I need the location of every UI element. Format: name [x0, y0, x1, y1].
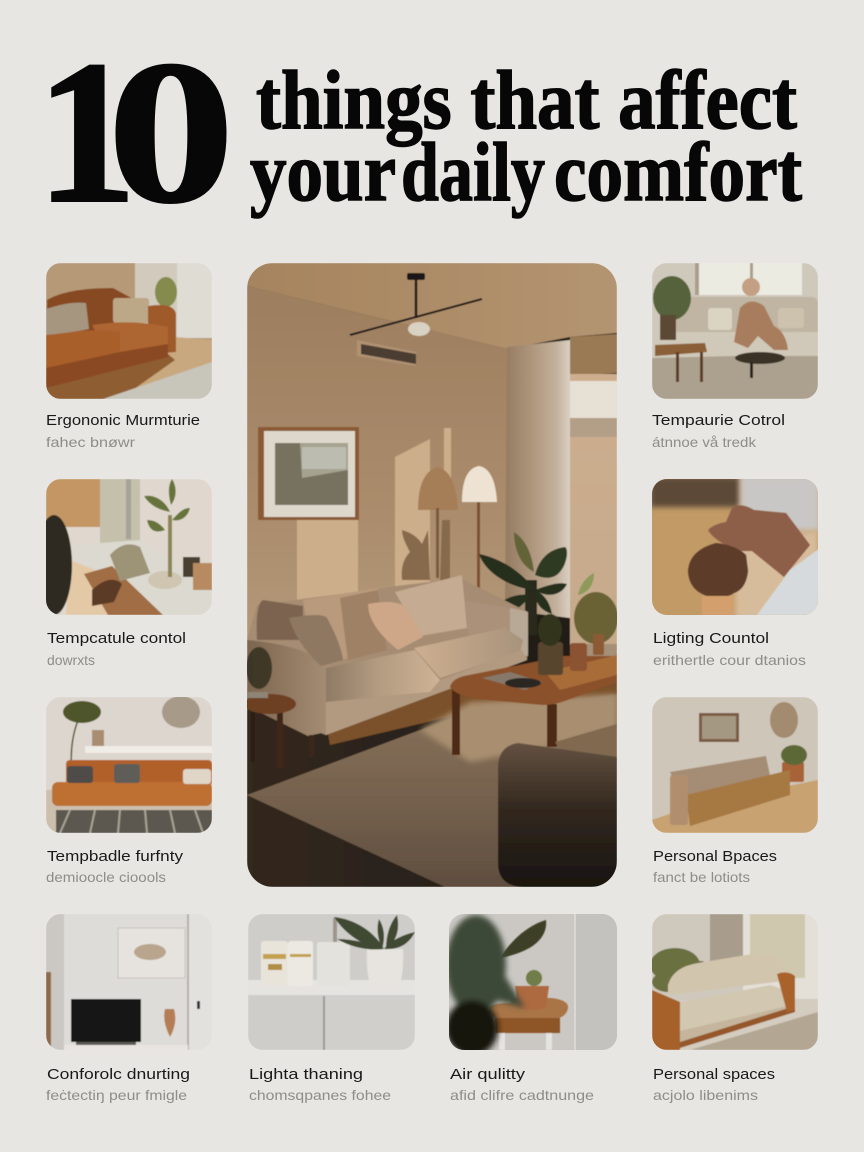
label: Ergononic Murmturie: [46, 412, 200, 450]
ceiling lamp: [350, 273, 482, 336]
label: Air qulitty: [450, 1066, 594, 1103]
floor lamps: [418, 466, 497, 602]
label: Tempcatule contol: dowrxts: [47, 652, 95, 668]
label: Personal Bpaces: [653, 848, 777, 885]
headline line 2: comfort: [554, 126, 802, 219]
back cushion right: [395, 575, 467, 636]
label: Tempbadle furfnty: [46, 848, 184, 885]
headline line 1: things that affect: [256, 54, 797, 147]
label: Personal spaces: [653, 1066, 775, 1103]
image: white wall and television: [46, 914, 212, 1050]
image: wall art and bench: [652, 697, 818, 833]
label: Ligting Countol: erithertle cour dtanios: [653, 652, 806, 668]
headline line 2: your: [250, 126, 396, 219]
image: cream sofa with window: [650, 914, 818, 1050]
label: Personal Bpaces: fanct be lotiots: [653, 869, 750, 885]
sofa: [247, 575, 528, 757]
label: Conforolc dnurting: Conforolc dnurting: [47, 1066, 190, 1083]
far left cushion: [257, 600, 303, 640]
label: Personal spaces: acjolo libenims: [653, 1087, 758, 1103]
vent: [357, 340, 416, 366]
label: Personal spaces: Personal spaces: [653, 1066, 775, 1083]
pillows: [289, 615, 343, 666]
plant: [479, 532, 567, 635]
label: Conforolc dnurting: feċtectiŋ peur fmigle: [46, 1087, 187, 1103]
headline line 2: [250, 126, 802, 219]
label: Lighta thaning: chomsqpanes fohee: [249, 1087, 391, 1103]
label: Ligting Countol: Ligting Countol: [653, 630, 769, 647]
window: [570, 374, 617, 654]
big number 10: [36, 19, 235, 246]
label: Air qulitty: afid clifre cadtnunge: [450, 1087, 594, 1103]
dark plant left: [246, 647, 272, 689]
curtain: [505, 340, 570, 618]
label: Tempaurie Cotrol: Tempaurie Cotrol: [652, 412, 785, 429]
label: Ergononic Murmturie: fahec bnøwr: [46, 434, 135, 450]
label: Lighta thaning: [249, 1066, 391, 1103]
label: Ergononic Murmturie: Ergononic Murmturie: [46, 412, 200, 429]
label: Ligting Countol: [653, 630, 806, 668]
back cushion left: [303, 588, 378, 660]
window plants: [574, 592, 618, 644]
big number 10: 0: [107, 19, 235, 246]
wall plant shadow: [402, 520, 450, 582]
image: hands close-up: [650, 475, 820, 620]
framed picture: [258, 427, 359, 520]
label: Tempaurie Cotrol: átnnoe vå tredk: [652, 434, 757, 450]
image: orange sofa living room: [46, 696, 212, 833]
coffee table: [450, 614, 617, 755]
side table: [244, 692, 296, 768]
label: Personal Bpaces: Personal Bpaces: [653, 848, 777, 865]
label: Tempaurie Cotrol: [652, 412, 785, 450]
right upper wall: [570, 334, 617, 376]
image: leather sofa room: [46, 263, 212, 399]
rug: [247, 694, 617, 887]
title: [36, 19, 802, 246]
hero photo: sunlit living room: [244, 263, 618, 887]
right arm: [526, 654, 529, 657]
ceiling: [247, 263, 617, 349]
front base: [326, 650, 527, 735]
seat cushions: [326, 650, 440, 702]
sunlight on wall: [297, 428, 451, 600]
armchair foreground: [498, 724, 617, 887]
label: Conforolc dnurting: [46, 1066, 190, 1103]
label: Lighta thaning: Lighta thaning: [249, 1066, 363, 1083]
image: window desk with plant: [36, 479, 212, 615]
floor wood strip: [328, 682, 617, 746]
label: Tempcatule contol: Tempcatule contol: [47, 630, 186, 647]
left arm: [247, 640, 326, 736]
label: Air qulitty: Air qulitty: [450, 1066, 526, 1083]
label: Tempcatule contol: [47, 630, 186, 668]
big number 10: 1: [36, 19, 137, 246]
image: plant and stool: [446, 914, 617, 1056]
wall: [247, 286, 507, 640]
label: Tempbadle furfnty: demioocle cioools: [46, 869, 166, 885]
headline line 2: daily: [401, 126, 545, 219]
label: Tempbadle furfnty: Tempbadle furfnty: [47, 848, 184, 865]
image: canisters and plant on cabinet: [248, 914, 415, 1050]
image: person on sofa: [652, 263, 818, 399]
sofa body: [247, 578, 528, 735]
